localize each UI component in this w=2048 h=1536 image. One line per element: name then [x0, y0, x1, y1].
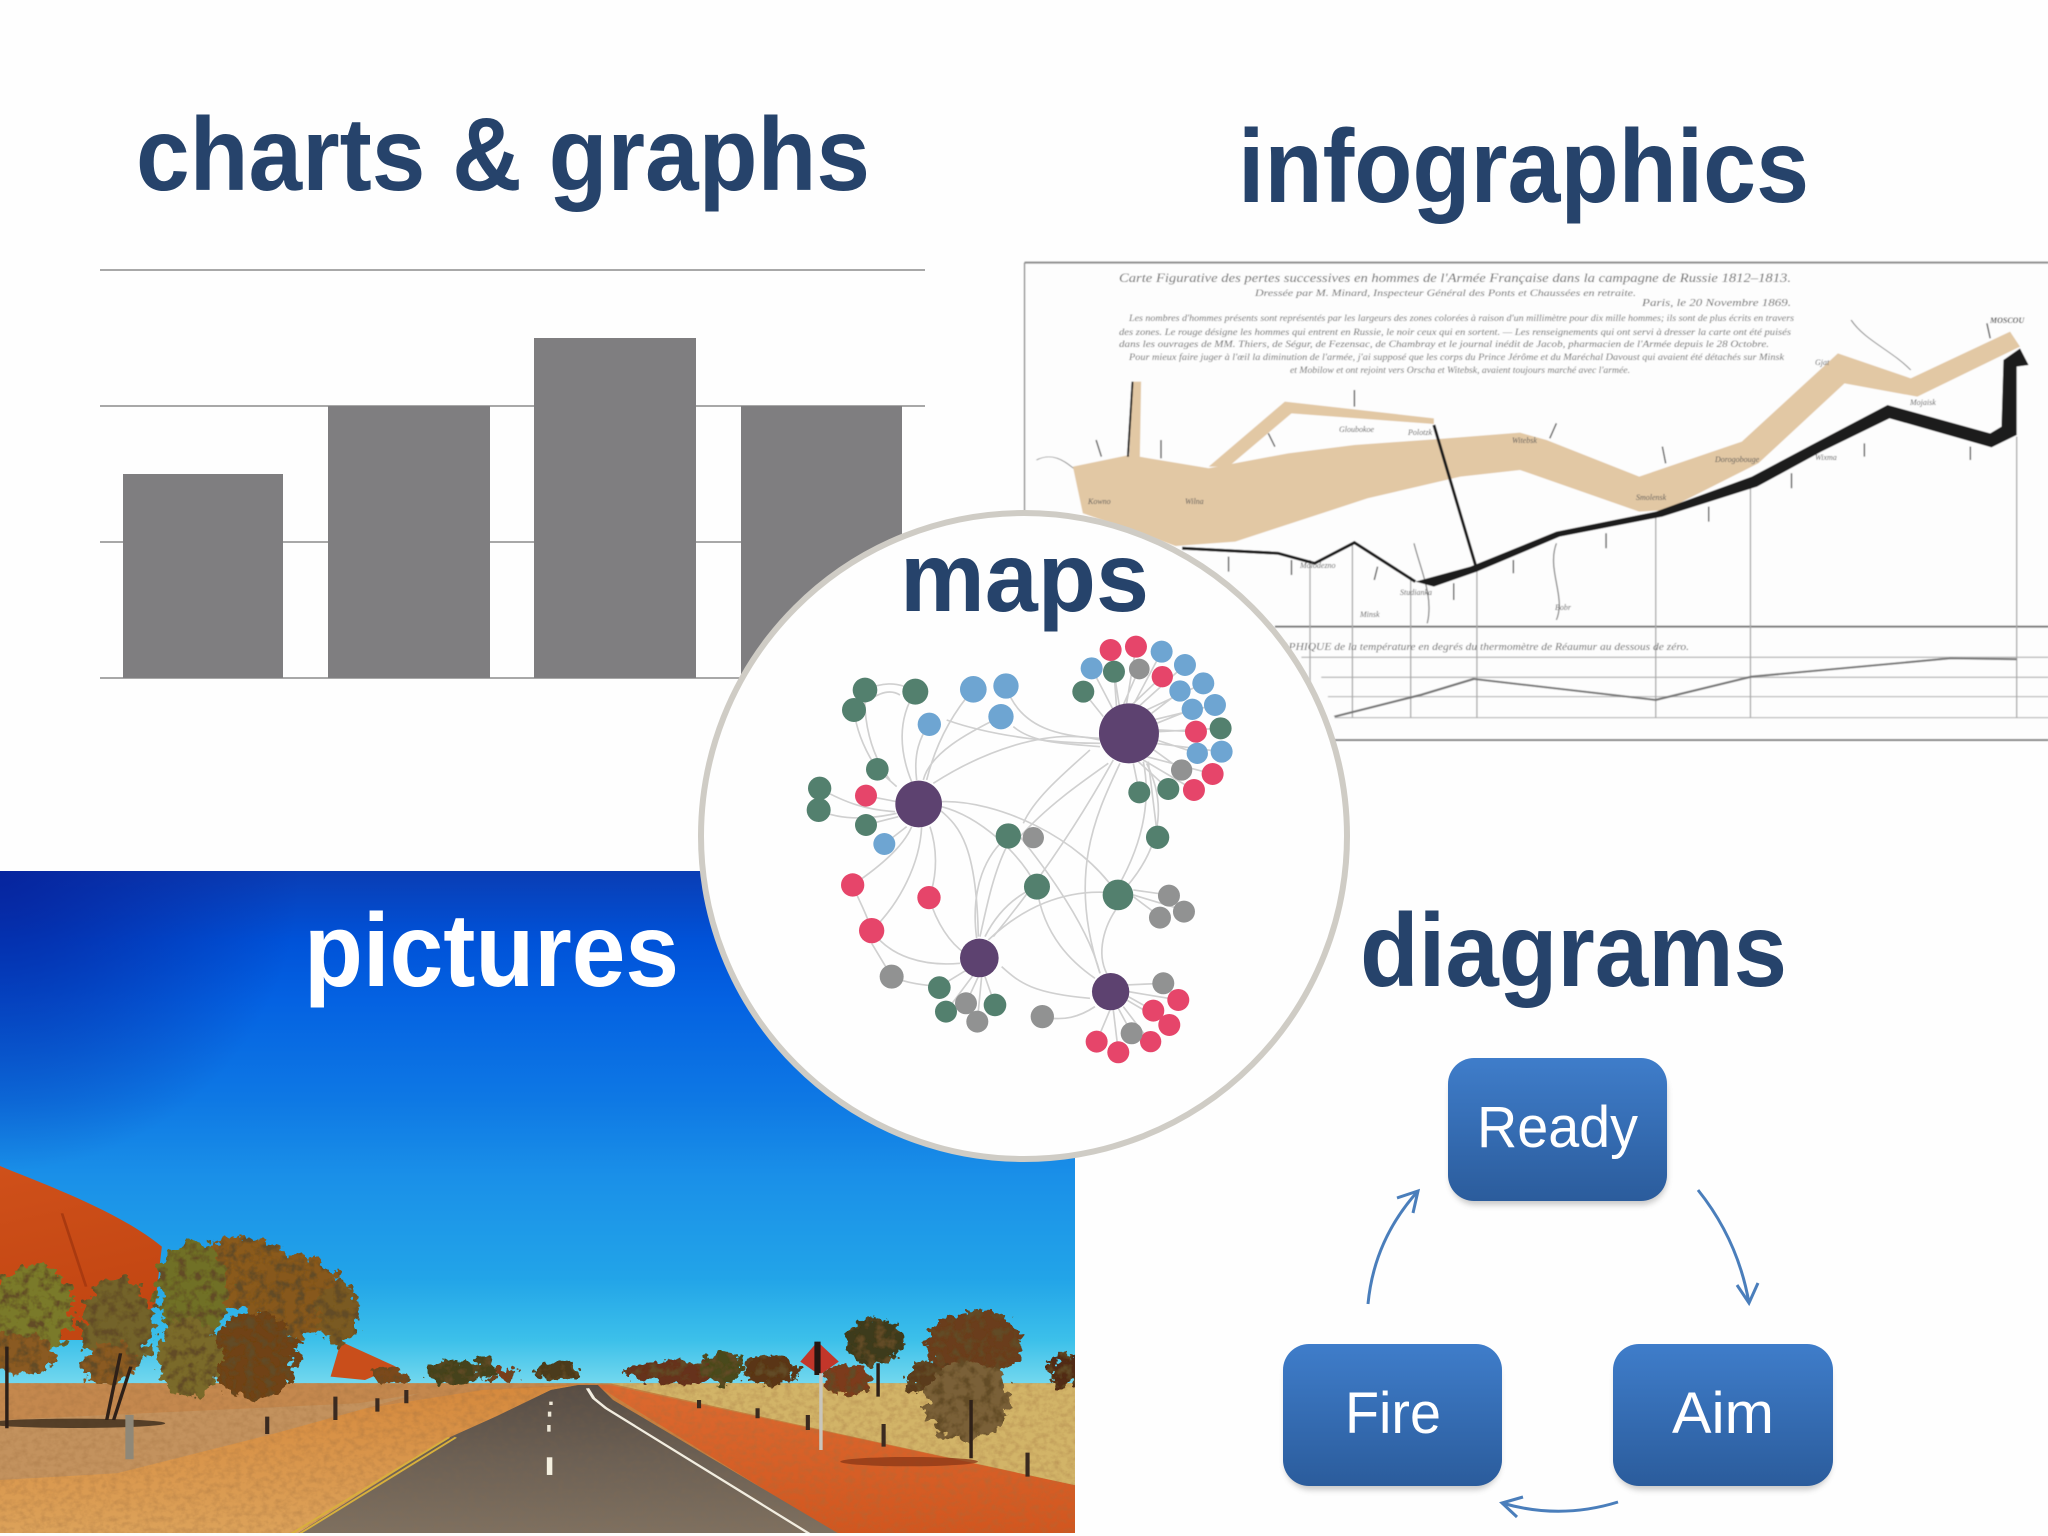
network graph — [807, 636, 1233, 1063]
Minard place labels: Studianka — [1400, 588, 1432, 597]
cycle diagram — [1283, 1058, 1833, 1517]
Minard title text: et Mobilow et ont rejoint vers Orscha et Witebsk, avaient toujours marché avec l'armée. — [1290, 366, 1630, 376]
trees — [0, 1238, 1079, 1440]
Minard place labels: Wixma — [1815, 453, 1837, 462]
arrow: Aim to Fire — [1502, 1497, 1618, 1517]
road sign — [800, 1342, 839, 1375]
Minard place labels: Gloubokoe — [1339, 425, 1375, 434]
Minard title text — [1119, 270, 1794, 376]
fence posts — [129, 1390, 1028, 1477]
arrow: Fire to Ready — [1368, 1191, 1418, 1304]
photo: outback road — [0, 871, 1081, 1536]
Minard place labels: Kowno — [1087, 497, 1111, 506]
circle background — [701, 513, 1347, 1159]
panel: pictures — [0, 871, 1081, 1536]
red nodes — [841, 636, 1224, 1063]
panel: maps circle — [701, 513, 1347, 1159]
heading: maps: maps — [900, 522, 1149, 632]
heading: infographics: infographics — [1238, 109, 1809, 225]
Minard place labels: Bobr — [1555, 603, 1572, 612]
Minard title text: des zones. Le rouge désigne les hommes qui entrent en Russie, le noir ceux qui en sortent. — Les renseignements qui ont servi à dresser la carte ont été puisés — [1119, 328, 1791, 338]
Minard title text: Pour mieux faire juger à l'œil la diminution de l'armée, j'ai supposé que les corps du Prince Jérôme et du Maréchal Davoust qui avaient été détachés sur Minsk — [1128, 352, 1785, 363]
Minard place labels: Witebsk — [1512, 436, 1537, 445]
arrow: Ready to Aim — [1698, 1190, 1758, 1303]
Minard place labels: Wilna — [1185, 497, 1204, 506]
blue nodes — [873, 641, 1233, 855]
box: Fire — [1283, 1344, 1502, 1490]
Minard place labels: Minsk — [1359, 610, 1380, 619]
panel: diagrams — [1283, 893, 1833, 1517]
Minard place labels: Polotzk — [1407, 428, 1432, 437]
ground shadow — [0, 1419, 165, 1428]
box: Fire: Fire — [1345, 1381, 1441, 1446]
heading: diagrams: diagrams — [1360, 893, 1787, 1009]
Minard title text: Les nombres d'hommes présents sont représentés par les largeurs des zones colorées à raison d'un millimètre pour dix mille hommes; ils sont de plus écrits en travers — [1128, 314, 1794, 324]
hub nodes — [895, 703, 1159, 1010]
bar chart — [100, 270, 925, 678]
Minard place labels: Mojaisk — [1909, 398, 1936, 407]
panel: charts and graphs — [100, 97, 925, 678]
Minard place labels — [1087, 316, 2025, 619]
panel: infographics — [1025, 109, 2048, 740]
Minard title text: Paris, le 20 Novembre 1869. — [1641, 297, 1791, 309]
Minard title text: Carte Figurative des pertes successives en hommes de l'Armée Française dans la campagne de Russie 1812–1813. — [1119, 270, 1791, 285]
heading: pictures: pictures — [304, 893, 679, 1009]
Minard place labels: Smolensk — [1636, 493, 1667, 502]
Minard place labels: Molodezno — [1299, 561, 1336, 570]
box: Aim — [1613, 1344, 1833, 1490]
Minard temperature chart caption: TABLEAU GRAPHIQUE de la température en degrés du thermomètre de Réaumur au dessous de zéro. — [1215, 642, 1689, 653]
Minard place labels: MOSCOU — [1989, 316, 2025, 325]
grey nodes — [880, 659, 1195, 1044]
box: Aim: Aim — [1672, 1381, 1774, 1446]
green nodes — [807, 661, 1232, 1023]
Minard place labels: Dorogobouge — [1714, 455, 1760, 464]
graph edges — [818, 647, 1222, 1052]
Minard place labels: Gjat — [1815, 358, 1830, 367]
Minard map — [1025, 263, 2048, 740]
box: Ready: Ready — [1477, 1095, 1638, 1160]
heading: charts & graphs: charts & graphs — [136, 97, 870, 213]
Minard title text: dans les ouvrages de MM. Thiers, de Ségur, de Fezensac, de Chambray et le journal inédit de Jacob, pharmacien de l'Armée depuis le 28 Octobre. — [1119, 340, 1769, 350]
rock — [0, 1166, 162, 1340]
Minard title text: Dressée par M. Minard, Inspecteur Général des Ponts et Chaussées en retraite. — [1254, 289, 1636, 299]
box: Ready — [1448, 1058, 1667, 1205]
